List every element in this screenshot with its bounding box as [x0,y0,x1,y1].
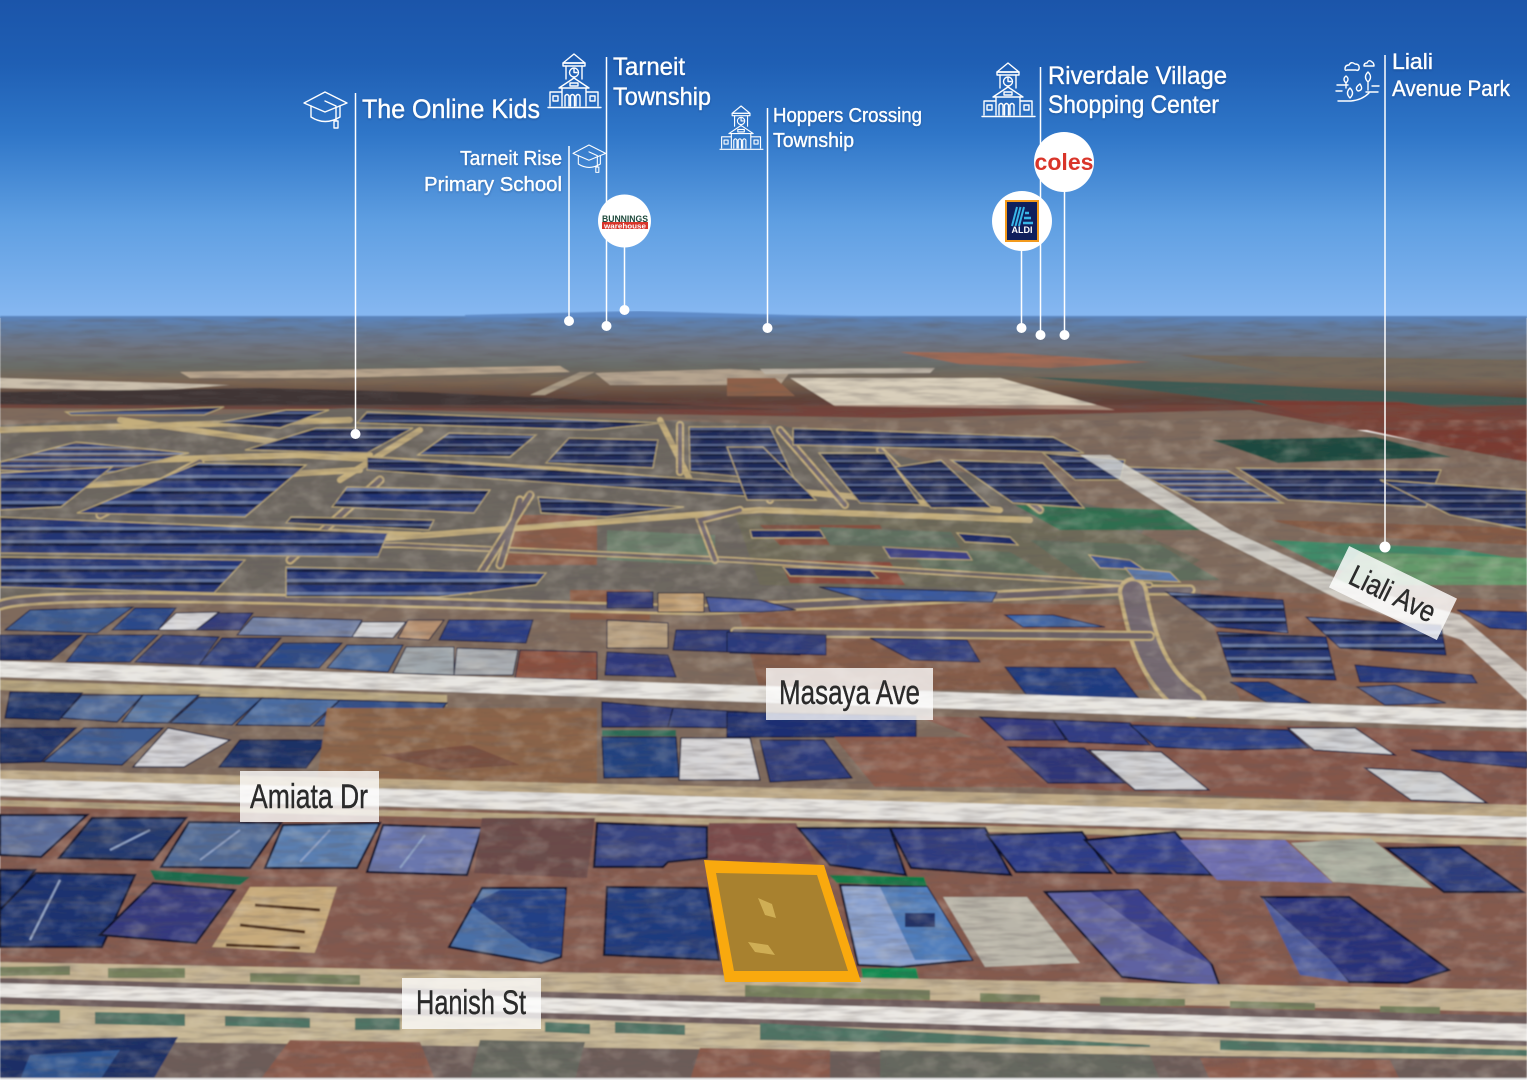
road label: Masaya Ave [766,668,933,720]
Hanish St verge and road [0,962,1527,1048]
suburb base ground [0,408,1527,1080]
background: sky [0,0,1527,318]
block between Masaya and Amiata, left [0,680,916,787]
label: Liali Avenue Park: Liali [1392,49,1433,74]
road label: Liali Ave: Liali Ave [1344,559,1441,629]
subject lot: orange outlined parcel [704,860,861,982]
label: Riverdale Village Shopping Center: Riverdale Village [1048,62,1227,90]
foreground houses, left [0,815,815,965]
icon: park with trees and clouds [1336,61,1379,101]
vacant paddocks [500,505,1527,710]
label: Tarneit Rise Primary School [424,147,562,196]
icon: township hall, Hoppers Crossing [720,106,763,149]
photographic grain over terrain [0,318,1527,1078]
logo: Bunnings Warehouse: BUNNINGS [602,214,648,224]
logo: Coles [1034,132,1094,192]
Masaya Ave road surface [0,661,1527,728]
label: Hoppers Crossing Township [773,104,922,152]
Amiata Dr road surface [0,779,1527,837]
logo: Aldi [992,191,1052,251]
logo: Bunnings Warehouse: warehouse [603,222,646,230]
icon: township hall, Tarneit [548,54,601,108]
leader: Tarneit Rise Primary School [564,146,574,326]
label: Tarneit Township: Tarneit [613,53,685,81]
road label: Masaya Ave: Masaya Ave [779,674,920,712]
light dust texture over terrain [0,420,1527,1078]
road label: Hanish St [402,978,541,1029]
leader: Hoppers Crossing Township [762,108,772,333]
label: Tarneit Rise Primary School: Tarneit Rise [460,147,562,170]
icon: township hall, Riverdale [982,63,1035,116]
far house rows [0,407,1527,597]
ground below Amiata Dr [0,798,1527,1040]
label: Tarneit Rise Primary School: Primary School [424,173,562,196]
leader: Bunnings [620,246,630,315]
bottom strip of ground [0,1004,1527,1080]
block between Masaya and Amiata, right [834,716,1527,810]
label: Tarneit Township: Township [613,83,711,111]
aerial photo of the estate [0,311,1527,1080]
road label: Amiata Dr [240,771,379,822]
road label: Hanish St: Hanish St [416,984,526,1022]
suburb streets [0,420,1192,703]
leader: Riverdale Village [1036,67,1046,340]
label: Liali Avenue Park: Avenue Park [1392,76,1511,101]
leader: Coles [1060,190,1070,340]
label: Liali Avenue Park [1392,49,1511,101]
road label: Amiata Dr: Amiata Dr [250,778,368,816]
label: Riverdale Village Shopping Center: Shopping Center [1048,91,1219,119]
icon: graduation cap, Tarneit Rise [573,145,606,172]
Amiata verge [0,770,1527,820]
leader: Aldi [1016,250,1026,333]
leader: Liali Avenue Park [1380,55,1390,552]
icon: graduation cap, The Online Kids [304,92,347,128]
foreground houses, right [798,828,1523,987]
leader: Tarneit Township [602,57,612,331]
label: Riverdale Village Shopping Center [1048,62,1227,119]
Liali Ave road [1080,455,1527,700]
label: The Online Kids: The Online Kids [362,94,540,124]
logo: Bunnings Warehouse [598,194,651,248]
mid house blocks [0,587,1527,705]
logo: Aldi: ALDI [1012,225,1032,235]
leader: The Online Kids [350,93,360,439]
label: Hoppers Crossing Township: Township [773,129,854,152]
logo: Coles: coles [1034,149,1094,175]
label: Hoppers Crossing Township: Hoppers Crossing [773,104,922,127]
label: Tarneit Township [613,53,711,111]
dark green field [1212,437,1451,463]
distant plains [0,311,1527,465]
